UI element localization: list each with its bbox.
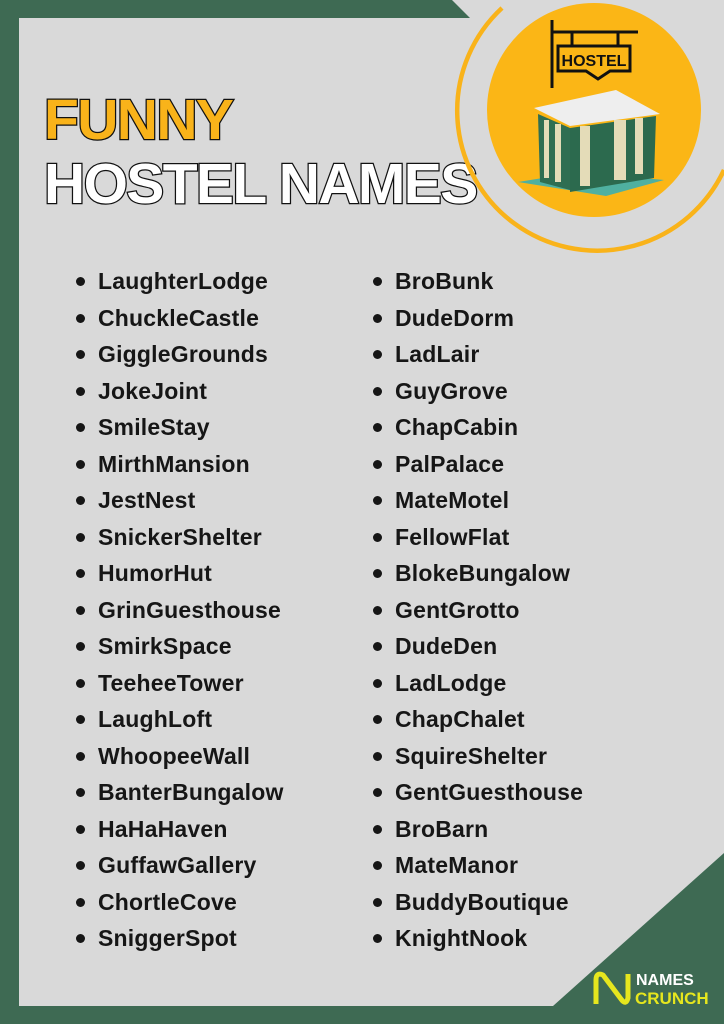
list: right column: BroBarn: [395, 816, 488, 842]
list: right column: DudeDen: [395, 633, 497, 659]
list: right column: PalPalace: [395, 450, 504, 476]
list: left column: LaughLoft: [98, 706, 212, 732]
logo: CRUNCH: [635, 989, 709, 1008]
title: FUNNY: [44, 88, 232, 152]
list: right column: [373, 268, 583, 951]
list: right column: BuddyBoutique: [395, 888, 569, 914]
logo: NAMES: [636, 972, 694, 989]
list: right column: ChapChalet: [395, 706, 525, 732]
list: left column: HumorHut: [98, 560, 212, 586]
sign: [552, 20, 638, 88]
list: left column: MirthMansion: [98, 450, 250, 476]
list: left column: SnickerShelter: [98, 524, 262, 550]
list: right column: FellowFlat: [395, 524, 509, 550]
list: right column: ChapCabin: [395, 414, 518, 440]
list: left column: HaHaHaven: [98, 816, 228, 842]
list: left column: BanterBungalow: [98, 779, 284, 805]
list: right column: MateMotel: [395, 487, 509, 513]
list: left column: ChortleCove: [98, 888, 237, 914]
list: left column: [76, 268, 284, 951]
list: right column: KnightNook: [395, 925, 527, 951]
list: left column: LaughterLodge: [98, 268, 268, 294]
list: right column: SquireShelter: [395, 742, 547, 768]
list: right column: BroBunk: [395, 268, 494, 294]
list: right column: GuyGrove: [395, 378, 508, 404]
list: right column: BlokeBungalow: [395, 560, 570, 586]
icon: hostel circle: HOSTEL: [562, 53, 627, 70]
list: left column: JokeJoint: [98, 378, 207, 404]
list: left column: SmileStay: [98, 414, 210, 440]
building: [518, 172, 664, 196]
title: HOSTEL NAMES: [44, 152, 477, 216]
list: left column: GuffawGallery: [98, 852, 257, 878]
list: left column: GrinGuesthouse: [98, 596, 281, 622]
list: left column: JestNest: [98, 487, 196, 513]
list: right column: LadLair: [395, 341, 479, 367]
list: right column: DudeDorm: [395, 304, 514, 330]
list: left column: WhoopeeWall: [98, 742, 250, 768]
list: left column: TeeheeTower: [98, 670, 244, 696]
list: right column: LadLodge: [395, 670, 506, 696]
list: left column: GiggleGrounds: [98, 341, 268, 367]
list: left column: SmirkSpace: [98, 633, 232, 659]
list: left column: SniggerSpot: [98, 925, 237, 951]
list: right column: GentGrotto: [395, 596, 520, 622]
list: right column: GentGuesthouse: [395, 779, 583, 805]
icon: hostel circle: [454, 3, 724, 253]
list: left column: ChuckleCastle: [98, 304, 259, 330]
list: right column: MateManor: [395, 852, 518, 878]
logo: [594, 972, 709, 1008]
title: [44, 88, 478, 216]
